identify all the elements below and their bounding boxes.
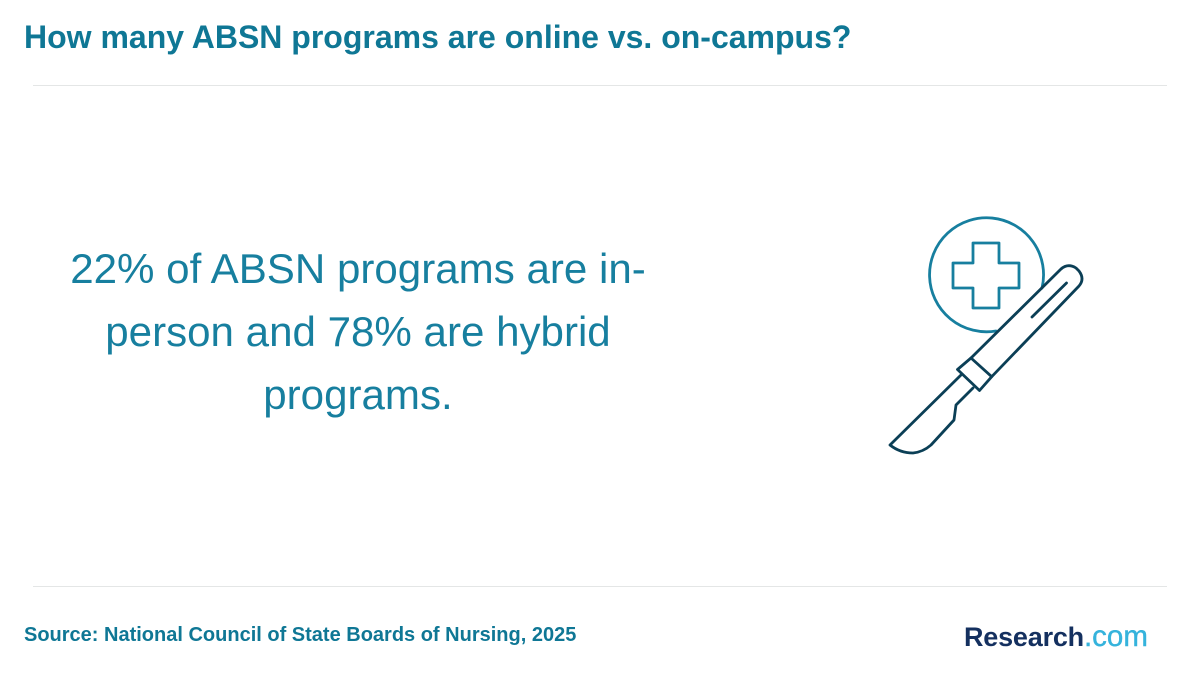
main statistic text: programs.	[263, 371, 453, 418]
icon: scalpel	[890, 266, 1082, 453]
main statistic text	[70, 245, 646, 418]
icon: scalpel with medical cross	[888, 216, 1084, 454]
logo: Research.com: Research.com	[964, 620, 1148, 653]
title: How many ABSN programs are online vs. on-campus?	[24, 19, 851, 55]
source note: Source: National Council of State Boards of Nursing, 2025	[24, 624, 576, 646]
icon: circle with medical cross	[930, 218, 1044, 332]
main statistic text: person and 78% are hybrid	[105, 308, 611, 355]
main statistic text: 22% of ABSN programs are in-	[70, 245, 646, 292]
